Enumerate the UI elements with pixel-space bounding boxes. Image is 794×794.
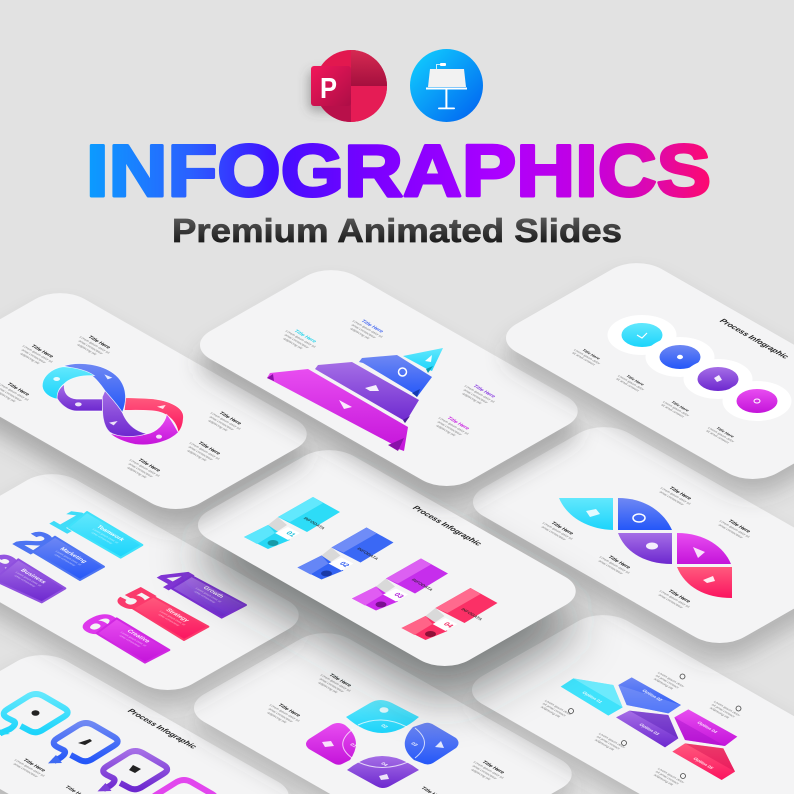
subtitle: Premium Animated Slides — [172, 212, 622, 249]
label: Option 01: Option 01 — [581, 691, 604, 704]
text: title 2: Title Here — [29, 344, 55, 359]
text: title 4: Lorem ipsum dolor sit — [209, 412, 242, 430]
card 3 — [0, 559, 65, 602]
text: option 2 note — [649, 671, 686, 692]
text: option 3 note: Lorem ipsum dolor — [598, 732, 627, 749]
block 03: INFODATA — [410, 578, 435, 592]
logo: PowerPoint — [308, 50, 387, 122]
text: title 4: amet consectetur — [597, 560, 625, 575]
card text: Creative: Creative — [125, 629, 151, 644]
text: step 4 — [703, 424, 741, 445]
text: title 4: Lorem ipsum dolor sit — [598, 556, 631, 574]
segment: blue — [63, 364, 126, 412]
block 01: 01 — [284, 531, 297, 538]
icon: chart — [129, 765, 141, 773]
text: title here top: Title Here — [327, 673, 353, 688]
segment: magenta — [110, 414, 178, 445]
text: step 2: Title Here — [625, 374, 646, 387]
text: purple title: Title Here — [471, 384, 497, 399]
pyramid tier: purple — [315, 362, 419, 423]
panel: quarter petals — [459, 419, 794, 669]
text: blue title: Lorem ipsum dolor sit — [351, 320, 384, 338]
text: step 1: Lorem ipsum dolor — [573, 349, 602, 365]
card 1 — [68, 512, 142, 558]
logo: PowerPoint: P — [320, 73, 337, 105]
block 04 — [402, 588, 498, 640]
infinity chart — [42, 364, 183, 445]
text: title here right: adipiscing elit — [470, 768, 492, 781]
digit 4: 4 — [144, 561, 206, 597]
text: step 2: Lorem ipsum dolor — [617, 375, 646, 391]
option 04 — [674, 709, 737, 746]
text: title 2: amet consectetur — [717, 524, 745, 539]
text: step 1 — [569, 346, 607, 367]
card text: Growth: amet consectetur — [193, 590, 217, 604]
panel: circles process — [492, 255, 794, 503]
card text: Creative: Lorem ipsum dolor sit — [119, 631, 148, 647]
icon: rocket — [425, 355, 432, 362]
text: title 3: Title Here — [549, 521, 575, 536]
heading: Process Infographic — [410, 505, 485, 547]
card text: Creative: amet consectetur — [118, 634, 142, 648]
text: blue title — [343, 317, 389, 343]
text: title 1 — [70, 333, 116, 359]
text: blue title: adipiscing elit — [349, 327, 371, 340]
block 04: INFODATA — [460, 607, 484, 621]
text: title here left: Lorem ipsum dolor sit — [268, 704, 301, 722]
panel: numbered cards — [0, 466, 313, 714]
text: step 3 — [658, 398, 696, 419]
text: title 2: Lorem ipsum dolor sit — [718, 520, 751, 538]
text: title 1: adipiscing elit — [76, 343, 98, 356]
petal: magenta — [306, 723, 358, 765]
segment: dark purple — [57, 384, 102, 411]
text: title 2 — [714, 517, 756, 541]
text: title here: Lorem ipsum dolor sit — [13, 759, 46, 777]
step circle 3 — [684, 359, 752, 399]
petal: pink — [677, 567, 732, 598]
petal: cyan — [346, 700, 419, 733]
segment: red — [124, 398, 183, 432]
icons on loop — [53, 374, 166, 439]
text: cyan title: adipiscing elit — [282, 337, 304, 350]
text: purple title: amet consectetur — [462, 389, 490, 404]
block 04: 04 — [441, 622, 454, 629]
digit 6: 6 — [69, 606, 130, 641]
text: title 4: adipiscing elit — [207, 419, 229, 432]
text: magenta title: amet consectetur — [436, 421, 464, 436]
text: title 1: amet consectetur — [77, 340, 105, 355]
card text: Business: Lorem ipsum dolor sit — [14, 571, 43, 587]
heading: Process Infographic — [125, 708, 200, 750]
card text: Teamwork: Lorem ipsum dolor sit — [91, 528, 120, 544]
text: title 2: Title Here — [726, 519, 752, 534]
text: step 4: sit amet consect — [705, 429, 730, 444]
text: title 6: Lorem ipsum dolor sit — [128, 459, 161, 477]
petal: cyan chart — [559, 498, 613, 530]
text: title 4 — [594, 553, 636, 577]
label: Option 04: Option 04 — [696, 721, 719, 734]
box: blue — [48, 723, 118, 763]
text: step 1: sit amet consect — [571, 351, 596, 366]
text: title here right: Title Here — [480, 760, 506, 775]
text: title here left: adipiscing elit — [266, 711, 288, 724]
panel: options — [458, 607, 794, 794]
text: title 6 — [120, 456, 166, 482]
text: title here — [9, 756, 51, 780]
text: step 4: Lorem ipsum dolor — [707, 427, 736, 443]
step circle 4 — [722, 381, 792, 421]
petal: purple: 04 — [379, 762, 389, 767]
text: title here right — [464, 758, 510, 784]
text: step 3: Title Here — [670, 400, 691, 413]
text: option 1 note: adipiscing elit — [540, 706, 561, 718]
text: title here left: amet consectetur — [267, 708, 295, 723]
text: step 1: Title Here — [581, 348, 602, 361]
text: option 4 note: Lorem ipsum dolor — [713, 700, 742, 717]
text: title here top: amet consectetur — [318, 678, 346, 693]
text: option 3 note: adipiscing elit — [594, 739, 615, 751]
text: title here left — [260, 701, 306, 727]
card text: Marketing: amet consectetur — [53, 553, 77, 567]
card text: Growth: Growth — [201, 586, 225, 599]
text: purple title — [455, 382, 501, 408]
card text: Teamwork — [88, 525, 126, 547]
text: blue title: amet consectetur — [350, 324, 378, 339]
card text: Strategy — [155, 607, 192, 628]
text: option 5 note: adipiscing elit — [653, 774, 674, 786]
text: title 5 — [654, 587, 696, 611]
text: title 1: Lorem ipsum dolor sit — [78, 336, 111, 354]
text: title 5: amet consectetur — [187, 446, 215, 461]
text: option 3 note: sit amet consect — [595, 735, 621, 750]
option 05 — [672, 743, 735, 780]
block 02: INFODATA — [356, 547, 380, 561]
digit 5: 5 — [105, 581, 166, 616]
option 01 — [561, 678, 623, 716]
text: title 3 — [537, 519, 579, 543]
card text: Growth: Lorem ipsum dolor sit — [194, 587, 223, 603]
digit 1: 1 — [40, 503, 101, 538]
label: Option 03: Option 03 — [638, 723, 661, 736]
icon: person — [78, 739, 92, 745]
pyramid tier: blue — [359, 355, 432, 397]
text: option 2 note: sit amet consect — [654, 674, 680, 689]
text: step 3: sit amet consect — [660, 403, 685, 418]
card text: Growth — [191, 584, 228, 605]
text: cyan title — [276, 327, 322, 353]
text: option 5 note: sit amet consect — [654, 770, 680, 785]
text: option 3 note — [590, 732, 627, 753]
card text: Strategy: Lorem ipsum dolor sit — [158, 610, 187, 626]
card text: Creative — [116, 628, 153, 649]
text: purple title: adipiscing elit — [461, 392, 483, 405]
icon: option 2 — [680, 674, 685, 679]
text: title 5: Lorem ipsum dolor sit — [658, 590, 691, 608]
block 03 — [352, 558, 448, 610]
segment: center purple — [102, 391, 147, 437]
text: title 5: adipiscing elit — [186, 449, 208, 462]
option 02 — [618, 677, 681, 713]
icon: option 1 — [568, 708, 574, 714]
block 01: INFODATA — [302, 516, 327, 530]
text: option 2 note: Lorem ipsum dolor — [657, 671, 686, 688]
card 5 — [133, 597, 208, 640]
text: title 2: amet consectetur — [20, 349, 48, 364]
text: title 2: adipiscing elit — [19, 352, 41, 365]
block 01 — [244, 497, 340, 549]
pyramid tier: magenta — [267, 369, 408, 451]
text: blue title: Title Here — [359, 319, 385, 334]
icon: bulb — [32, 710, 40, 716]
pyramid tier: cyan — [403, 348, 443, 373]
card 4 — [172, 576, 246, 618]
text: title 5: amet consectetur — [657, 594, 685, 609]
text: title 6: amet consectetur — [127, 463, 155, 478]
text: cyan title: amet consectetur — [283, 334, 311, 349]
panel: pyramid — [186, 262, 592, 512]
text: option 2 note: adipiscing elit — [653, 678, 674, 690]
text: step 2: sit amet consect — [615, 377, 640, 392]
card 2 — [33, 537, 104, 580]
box: magenta — [152, 780, 216, 794]
text: option 4 note: sit amet consect — [710, 703, 736, 718]
text: magenta title — [429, 414, 475, 440]
text: title here top: Lorem ipsum dolor sit — [319, 674, 352, 692]
panel: 3D info blocks — [184, 442, 590, 704]
panel: four petals circle — [180, 625, 586, 794]
text: cyan title: Lorem ipsum dolor sit — [284, 330, 317, 348]
box: purple — [98, 751, 167, 791]
text: option 5 note — [649, 767, 686, 788]
text: title 4: Title Here — [217, 411, 243, 426]
text: title 2 — [13, 342, 59, 368]
box: cyan — [0, 694, 68, 735]
card text: Marketing: Lorem ipsum dolor sit — [54, 550, 83, 566]
text: title 3: Lorem ipsum dolor sit — [541, 522, 574, 540]
title: INFOGRAPHICS — [86, 131, 711, 212]
text: step 3: Lorem ipsum dolor — [662, 401, 691, 417]
logo: Keynote — [410, 49, 483, 122]
card 6 — [97, 618, 169, 663]
icon: option 4 — [736, 706, 741, 711]
petal: blue — [405, 723, 458, 764]
text: magenta title: Lorem ipsum dolor sit — [437, 417, 470, 435]
text: title 3: Title Here — [5, 382, 31, 397]
icon: option 5 — [680, 774, 686, 778]
block 02: 02 — [337, 561, 350, 568]
text: title here left: Title Here — [276, 703, 302, 718]
segment: cyan — [42, 367, 94, 399]
text: title here: Title Here — [21, 758, 47, 773]
text: title 1: Lorem ipsum dolor sit — [659, 487, 692, 505]
petal: purple — [618, 533, 672, 564]
text: title here top: adipiscing elit — [317, 681, 339, 694]
text: title 3 — [0, 380, 35, 406]
text: title 1: Title Here — [667, 486, 693, 501]
icon: pyramid 2 — [365, 385, 379, 391]
step circle 1 — [608, 315, 676, 355]
icon: option 3 — [622, 740, 626, 746]
text: title 4: Title Here — [606, 555, 632, 570]
text: option 5 note: Lorem ipsum dolor — [657, 767, 686, 784]
text: title 1: amet consectetur — [658, 491, 686, 506]
text: option 1 note: sit amet consect — [541, 702, 567, 717]
panel: process arrow boxes — [0, 647, 303, 794]
text: step 2 — [613, 372, 651, 393]
card text: Strategy: amet consectetur — [157, 613, 181, 627]
text: title here: amet consectetur — [12, 763, 40, 778]
text: option 1 note: Lorem ipsum dolor — [544, 699, 573, 716]
card text: Marketing — [51, 547, 88, 568]
text: magenta title: Title Here — [445, 416, 471, 431]
text: magenta title: adipiscing elit — [435, 424, 457, 437]
text: step 4: Title Here — [715, 426, 736, 439]
card text: Business: Business — [19, 568, 48, 585]
text: title 5 — [180, 439, 226, 465]
petal: purple — [347, 756, 419, 788]
petal: blue: 03 — [409, 742, 419, 747]
petal: cyan: 02 — [379, 724, 389, 729]
petal: blue — [618, 498, 672, 530]
heading: Process Infographic — [717, 318, 792, 360]
panel: infinity loop — [0, 285, 321, 535]
step circle 2 — [646, 337, 714, 377]
text: cyan title: Title Here — [292, 329, 318, 344]
text: title here right: amet consectetur — [471, 765, 499, 780]
label: Option 05: Option 05 — [692, 757, 715, 770]
text: title 5: Title Here — [666, 589, 692, 604]
card text: Business — [11, 568, 48, 589]
text: title 5: Title Here — [196, 441, 222, 456]
text: title 6: Title Here — [136, 458, 162, 473]
block 02 — [298, 528, 394, 580]
text: title 2: Lorem ipsum dolor sit — [21, 345, 54, 363]
block 03: 03 — [392, 592, 405, 599]
text: option 1 note — [536, 699, 573, 720]
option 03 — [616, 711, 678, 747]
text: title 1 — [655, 484, 697, 508]
card text: Teamwork: Teamwork — [95, 525, 126, 543]
label: Option 02: Option 02 — [641, 689, 664, 702]
text: title 5: Lorem ipsum dolor sit — [188, 442, 221, 460]
icon: gear — [398, 368, 406, 376]
text: title 6: adipiscing elit — [126, 466, 148, 479]
card text: Business: amet consectetur — [13, 574, 37, 588]
text: title 4: amet consectetur — [208, 416, 236, 431]
petal: magenta: 01 — [348, 743, 358, 748]
text: title 4 — [201, 409, 247, 435]
card text: Teamwork: amet consectetur — [90, 531, 114, 545]
icon: pyramid 1 — [339, 400, 352, 409]
card text: Strategy: Strategy — [164, 608, 190, 623]
text: option 4 note — [705, 700, 742, 721]
text: option 4 note: adipiscing elit — [709, 707, 730, 719]
text: title here right: Lorem ipsum dolor sit — [472, 761, 505, 779]
text: purple title: Lorem ipsum dolor sit — [463, 385, 496, 403]
text: title 1: Title Here — [86, 335, 112, 350]
petal: magenta — [677, 533, 731, 564]
text: title here top — [311, 671, 357, 697]
card text: Marketing: Marketing — [58, 547, 88, 564]
digit 2: 2 — [4, 524, 65, 559]
text: title 3: amet consectetur — [540, 526, 568, 541]
